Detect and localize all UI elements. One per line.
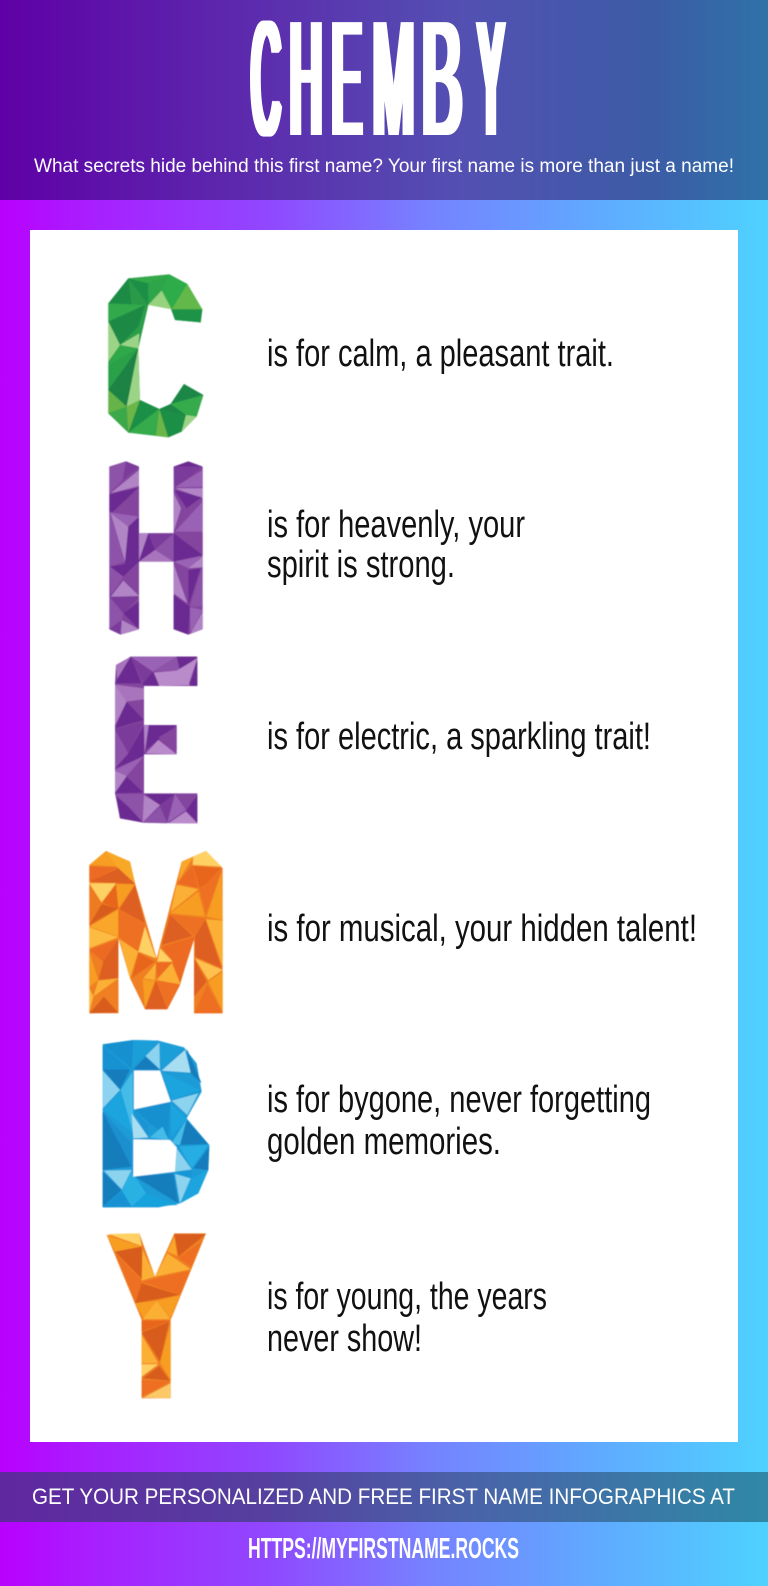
- footer call to action: GET YOUR PERSONALIZED AND FREE FIRST NAME INFOGRAPHICS AT: [32, 1484, 735, 1509]
- text: Y meaning: [267, 1276, 547, 1360]
- letter C, green low-poly: [108, 274, 203, 437]
- text: B meaning: [267, 1079, 651, 1163]
- footer band: [0, 1472, 768, 1522]
- footer URL: HTTPS://MYFIRSTNAME.ROCKS: [248, 1533, 519, 1565]
- text: B meaning: is for bygone, never forgetting: [267, 1079, 651, 1121]
- text: H meaning: spirit is strong.: [267, 544, 455, 586]
- letter M, orange low-poly: [89, 851, 223, 1013]
- text: H meaning: [267, 504, 525, 586]
- header band: [0, 0, 768, 200]
- subtitle: What secrets hide behind this first name? Your first name is more than just a name!: [34, 156, 734, 177]
- letter H, purple low-poly: [109, 461, 203, 635]
- text: Y meaning: never show!: [267, 1318, 422, 1360]
- text: B meaning: golden memories.: [267, 1121, 501, 1163]
- white content panel: [30, 230, 738, 1442]
- text: E meaning: is for electric, a sparkling trait!: [267, 716, 651, 758]
- letter B, blue low-poly: [103, 1040, 209, 1207]
- letter E, purple low-poly: [115, 657, 197, 823]
- text: Y meaning: is for young, the years: [267, 1276, 547, 1318]
- upper counter of B: [134, 1071, 171, 1109]
- text: H meaning: is for heavenly, your: [267, 504, 525, 546]
- text: C meaning: is for calm, a pleasant trait.: [267, 333, 614, 375]
- letter Y, orange low-poly: [107, 1233, 206, 1398]
- lower counter of B: [133, 1139, 177, 1177]
